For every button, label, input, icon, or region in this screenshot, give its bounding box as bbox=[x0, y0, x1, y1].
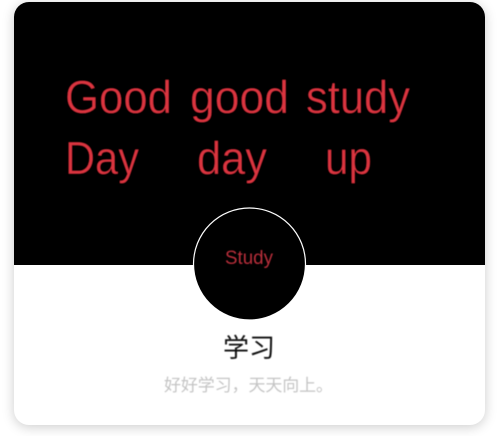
word: study: study bbox=[306, 71, 410, 123]
word: Good: Good bbox=[65, 71, 172, 123]
black banner bbox=[14, 2, 485, 265]
badge circle bbox=[194, 208, 306, 320]
word: day: day bbox=[197, 132, 267, 184]
subtitle: 好好学习，天天向上。 bbox=[164, 376, 333, 395]
badge label: Study bbox=[225, 247, 273, 269]
word: up: up bbox=[325, 132, 372, 184]
word: Day: Day bbox=[65, 132, 139, 184]
word: good: good bbox=[190, 71, 289, 123]
headline text bbox=[65, 71, 410, 184]
title: 学习 bbox=[223, 333, 275, 363]
